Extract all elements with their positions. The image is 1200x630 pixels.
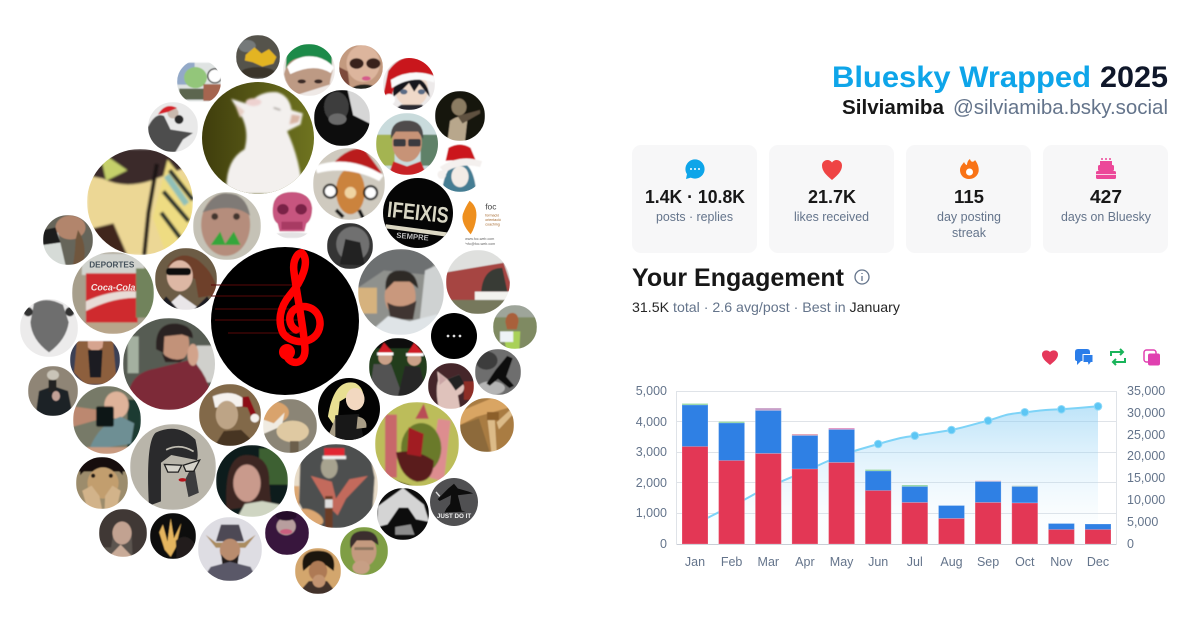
bar: Oct [1012,486,1038,544]
avatar: black and white rock [377,488,429,540]
avatar: grey shirt with v [294,444,378,529]
stat card: streak: 115 [954,187,984,207]
chart legend icons [1042,349,1160,366]
avatar: grey sketch [327,223,373,269]
stat card: days on Bluesky [1043,145,1168,253]
stat card: likes: likes received [794,209,869,224]
avatar: blonde cartoon [318,378,380,440]
month labels [685,555,1109,569]
bar: Jul [902,485,928,544]
stat card: days on Bluesky: days on Bluesky [1061,209,1151,224]
avatar: wooden beams [460,398,514,452]
avatar: Ifeixis shirt: IFEIXIS [386,197,450,228]
avatar: man with glasses [376,113,439,175]
month labels: Nov [1050,555,1073,569]
avatar: sepia santa man [199,384,261,446]
heading: your engagement: Your Engagement [632,264,845,292]
bar: Nov [1048,524,1074,544]
avatar: pink skull [272,191,313,238]
month labels: Aug [940,555,963,569]
avatar: hiker [493,305,537,349]
bar: Sep [975,480,1001,544]
month labels: Jul [907,555,923,569]
icon: heart [822,160,842,180]
left axis labels: 1,000 [636,506,667,520]
right axis labels: 5,000 [1127,515,1158,529]
avatar: raised hand [150,513,196,559]
left axis labels: 0 [660,537,667,551]
bar: Jan [682,404,708,544]
avatar: woman with sunglasses [155,248,217,310]
month labels: Oct [1015,555,1035,569]
avatar: black and white cat [428,363,474,409]
user name and handle: @silviamiba.bsky.social [953,97,1168,119]
avatar: mirror selfie [28,366,78,416]
avatar: man in car [358,249,444,335]
month labels: Mar [758,555,779,569]
engagement summary: 31.5K total · 2.6 avg/post · Best in January [632,299,900,315]
avatar: afro man [295,548,341,594]
icon: cake [1096,158,1116,179]
avatar: sepia guitarist [435,91,485,141]
avatar: foc logo: foc [485,202,496,212]
avatar cloud [20,35,537,594]
month labels: May [830,555,854,569]
avatar: foc logo [462,200,501,246]
bar: Aug [938,506,964,544]
avatar: anime santa [383,57,435,110]
icon: speech bubble [685,159,705,179]
right axis labels: 0 [1127,537,1134,551]
right axis labels: 30,000 [1127,406,1165,420]
avatar: coca cola sign [72,252,154,334]
right axis labels: 25,000 [1127,428,1165,442]
avatar: green santa hat man [283,44,335,96]
left axis labels: 5,000 [636,384,667,398]
avatar: purple hair [265,510,309,555]
avatar: grey runner [475,349,521,395]
grid lines [676,391,1116,544]
month labels: Sep [977,555,999,569]
bar: Mar [755,408,781,544]
month labels: Jan [685,555,705,569]
icon: reposts [1111,349,1125,365]
avatar: sunglasses blonde [339,45,383,89]
title: 2025 [1100,61,1168,94]
icon: likes [1042,350,1058,365]
bar: Feb [719,422,745,544]
avatar: pencil drawing woman [130,424,216,510]
avatar: white goat [202,82,314,194]
avatar: treble clef [211,247,359,395]
stat card: days on Bluesky: 427 [1090,187,1122,207]
avatar: red bridge [446,250,510,314]
avatar: curly hair woman [99,509,147,557]
icon: flame [960,159,979,179]
title: Bluesky Wrapped [832,61,1091,94]
stat card: posts and replies: 1.4K · 10.8K [645,187,745,207]
stat card: streak [906,145,1031,253]
avatar: foc logo: info@foc-web.com [465,242,495,246]
avatar: man green background [340,527,388,575]
avatar: coca cola sign: DEPORTES [89,261,135,270]
avatar: woman with cat [43,215,93,265]
icon: quotes [1144,350,1160,366]
avatar: baby with cup [73,386,141,454]
avatar: hands on face [76,457,128,509]
right axis labels: 35,000 [1127,384,1165,398]
avatar: yellow star flag [375,402,459,486]
month labels: Apr [795,555,815,569]
avatar: green cartoon [177,62,221,102]
bar: Jun [865,470,891,544]
avatar: just do it: JUST DO IT [437,513,471,520]
icon: replies [1075,349,1093,366]
cumulative area and line [695,402,1102,544]
avatar: foc logo: coaching [485,222,500,226]
avatar: coca cola sign: Coca-Cola [91,283,135,293]
stat card: posts and replies: posts · replies [656,209,733,224]
right axis labels: 20,000 [1127,449,1165,463]
bar: May [829,428,855,544]
stacked bars [682,404,1111,544]
avatar: santa burger [313,148,385,220]
avatar: foc logo: formació [485,213,499,217]
avatar: heart engraving [20,299,78,357]
stat card: posts and replies [632,145,757,253]
month labels: Dec [1087,555,1109,569]
icon: info [855,270,869,284]
left axis labels [636,384,667,551]
avatar: long hair woman [70,335,120,385]
avatar: ellipsis [431,313,477,359]
avatar: moss [236,35,280,79]
engagement chart [636,384,1165,569]
avatar: woman with trees [216,445,288,517]
right axis labels: 10,000 [1127,493,1165,507]
avatar: two santas [369,338,427,396]
avatar: maroon sweater man [123,318,217,410]
avatar: foc logo: orientació [485,218,501,222]
avatar: yellow illustration [87,149,193,255]
avatar: man with nose stickers [193,192,261,260]
bar: Dec [1085,524,1111,544]
right axis labels [1127,384,1165,551]
stat card: streak: day posting [937,209,1001,224]
avatar: dark profile man [314,90,370,146]
bar: Apr [792,434,818,544]
avatar: just do it [430,478,478,526]
stat card: likes: 21.7K [808,187,856,207]
stat card: streak: streak [952,225,986,240]
avatar: santa black and white [148,102,198,152]
left axis labels: 3,000 [636,445,667,459]
avatar: cat and mushroom [259,399,317,453]
avatar: Ifeixis shirt [383,178,453,248]
left axis labels: 4,000 [636,415,667,429]
left axis labels: 2,000 [636,476,667,490]
month labels: Jun [868,555,888,569]
avatar: Ifeixis shirt: SEMPRE [396,231,429,243]
stat card: likes [769,145,894,253]
avatar: horned man [198,517,262,581]
right axis labels: 15,000 [1127,471,1165,485]
avatar: foc logo: www.foc-web.com [465,237,494,241]
month labels: Feb [721,555,742,569]
user name and handle: Silviamiba [842,97,945,119]
avatar: santa drawing [436,144,484,192]
